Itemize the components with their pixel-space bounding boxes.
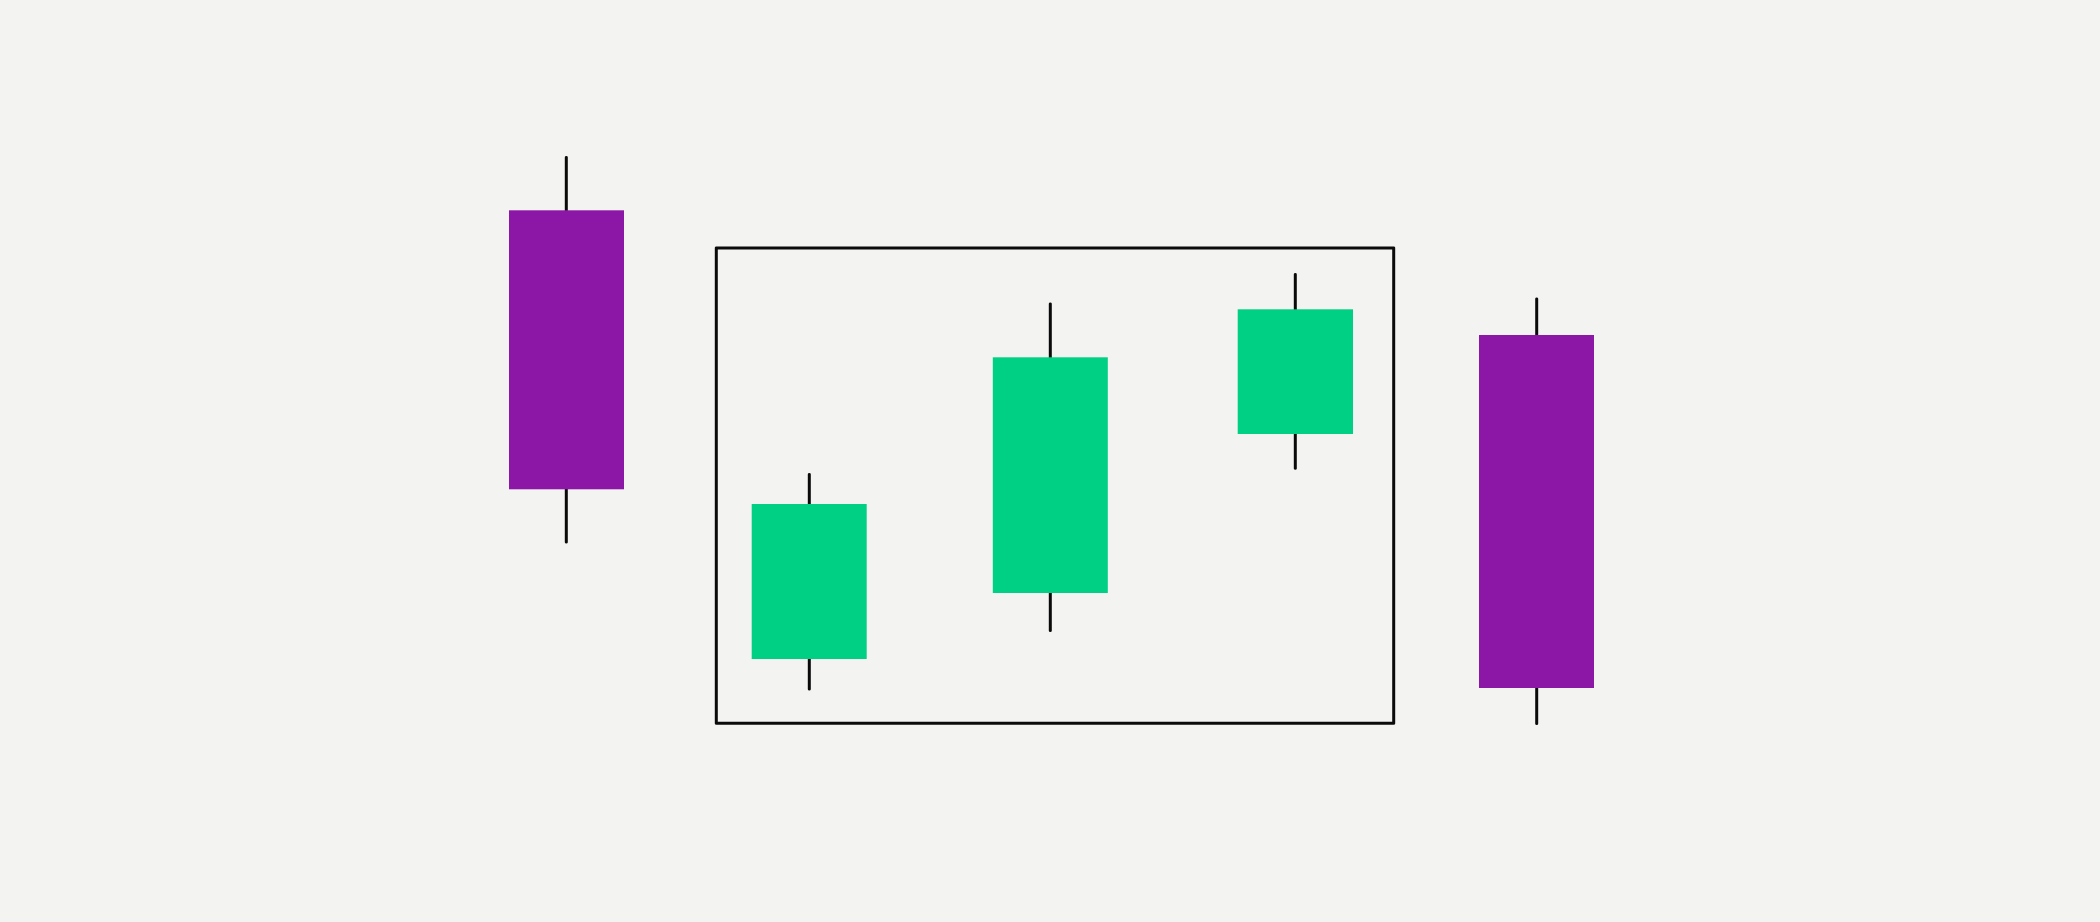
highlight frame around the three green candles	[716, 248, 1394, 723]
candle 1: purple bearish candle	[509, 158, 624, 542]
candle 3: green bullish candle	[993, 304, 1108, 630]
candle 4: green bullish candle	[1238, 274, 1353, 468]
candle 5: purple bearish candle	[1479, 299, 1594, 724]
candle 2: green bullish candle	[752, 474, 867, 689]
